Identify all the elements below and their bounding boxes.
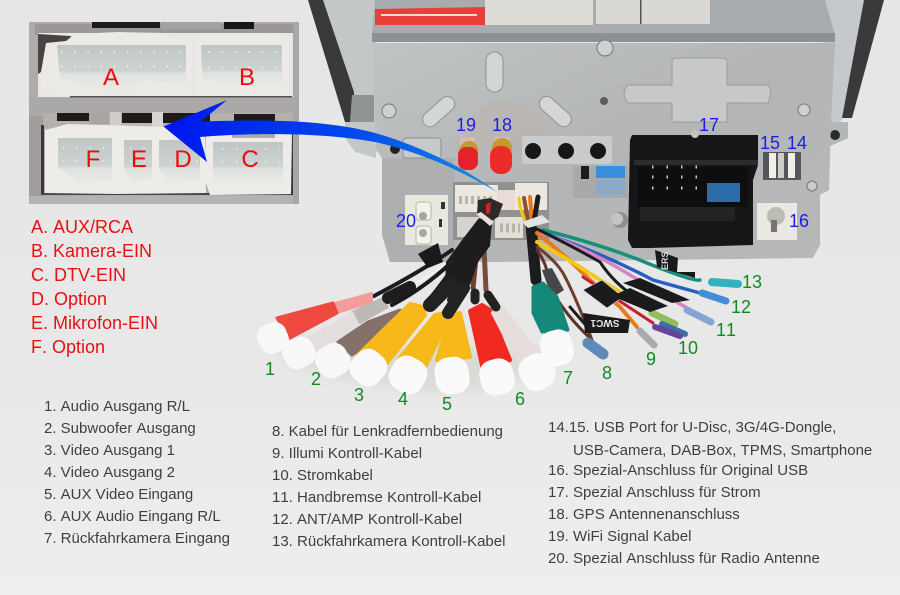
list: items 14 to 20: 19. WiFi Signal Kabel [548,528,691,545]
list: items 14 to 20: 17. Spezial Anschluss für Strom [548,484,761,501]
green cable numbers: 4 [398,389,408,409]
right mounting bracket [822,0,884,148]
list: items 8 to 13 [272,423,505,550]
port 20: radio antenna socket [405,195,448,245]
list: items 8 to 13: 12. ANT/AMP Kontroll-Kabel [272,511,462,528]
RCA plug 8: white [493,308,561,396]
blue port numbers: 20 [396,211,416,231]
connector letters: E [131,146,147,173]
green cable numbers: 9 [646,349,656,369]
black wire tags: SWC1 [590,317,619,328]
green cable numbers: 13 [742,272,762,292]
port plugs: holes [522,136,612,164]
connector letters: C [241,146,259,173]
port 16: original USB socket [757,181,817,240]
list: items 14 to 20: 20. Spezial Anschluss für Radio Antenne [548,550,820,567]
green cable numbers: 6 [515,389,525,409]
legend: connectors A to F [31,217,158,357]
wire end caps [588,282,738,354]
arrow: blue curved pointer to connector [164,100,497,192]
legend: connectors A to F: F. Option [31,337,105,357]
list: items 14 to 20: USB-Camera, DAB-Box, TPMS, Smartphone [573,442,872,459]
list: items 1 to 7: 5. AUX Video Eingang [44,486,193,503]
legend: connectors A to F: E. Mikrofon-EIN [31,313,158,333]
RCA plug 6: yellow [433,313,471,396]
list: items 14 to 20: 18. GPS Antennenanschluss [548,506,740,523]
list: items 8 to 13: 10. Stromkabel [272,467,373,484]
legend: connectors A to F: B. Kamera-EIN [31,241,152,261]
connector A [40,32,192,96]
black wire tags: ERS [660,251,670,270]
green cable numbers: 7 [563,368,573,388]
RCA plug 9: teal [533,283,577,370]
blue port numbers: 15 [760,133,780,153]
list: items 1 to 7 [44,398,230,547]
RCA plug 4: yellow [344,304,425,392]
connector letters [86,64,259,173]
list: items 8 to 13: 9. Illumi Kontroll-Kabel [272,445,422,462]
list: items 1 to 7: 2. Subwoofer Ausgang [44,420,196,437]
blue port numbers: 17 [699,115,719,135]
blue port numbers: 14 [787,133,807,153]
RCA plug 1: red [253,293,372,358]
list: items 1 to 7: 7. Rückfahrkamera Eingang [44,530,230,547]
list: items 1 to 7: 4. Video Ausgang 2 [44,464,175,481]
blue port numbers: 16 [789,211,809,231]
connector C [205,134,292,195]
RCA plug 5: yellow [383,313,447,400]
black wire tags [583,250,695,333]
black sleeve, heat shrink and cable tie [445,198,503,285]
list: items 1 to 7: 3. Video Ausgang 1 [44,442,175,459]
port 17: black power socket [628,130,758,248]
connectors F, E, D [45,124,206,194]
DIP switch [573,166,628,198]
connector letters: D [174,146,192,173]
list: items 8 to 13: 13. Rückfahrkamera Kontroll-Kabel [272,533,505,550]
green cable numbers: 12 [731,297,751,317]
green cable numbers: 2 [311,369,321,389]
green cable numbers [265,272,762,414]
list: items 14 to 20: 16. Spezial-Anschluss für Original USB [548,462,808,479]
connector letters: A [103,64,119,91]
panel: connector close-up photo [29,22,299,204]
blue port numbers: 18 [492,115,512,135]
radio unit: top cover [372,0,835,42]
cable loom: left group [374,248,486,305]
tag: black label left [418,243,443,268]
legend: connectors A to F: A. AUX/RCA [31,217,133,237]
list: items 8 to 13: 8. Kabel für Lenkradfernbedienung [272,423,503,440]
blue port numbers [396,115,809,231]
RCA plug 2: white [278,298,388,373]
green cable numbers: 10 [678,338,698,358]
plug shadows [275,340,550,391]
port 14 and 15: USB sockets [763,152,801,180]
RCA plug 7: red [470,305,518,399]
list: items 14 to 20: 14.15. USB Port for U-Disc, 3G/4G-Dongle, [548,419,836,436]
green cable numbers: 11 [716,320,736,340]
connector letters: B [239,64,255,91]
left mounting bracket [308,0,376,158]
connector letters: F [86,146,100,173]
legend: connectors A to F: C. DTV-EIN [31,265,126,285]
cable loom: right group [519,197,700,340]
list: items 14 to 20 [548,419,872,567]
green cable numbers: 5 [442,394,452,414]
list: items 8 to 13: 11. Handbremse Kontroll-Kabel [272,489,481,506]
legend: connectors A to F: D. Option [31,289,107,309]
connector B [195,33,289,96]
harness connectors plugged into the unit [453,182,549,240]
list: items 1 to 7: 1. Audio Ausgang R/L [44,398,190,415]
RCA plug 3: brown [310,310,400,383]
port 19 and 18: GPS and WiFi antenna connectors [458,137,512,174]
cable tie and tuft on the right bundle [522,215,564,298]
list: items 1 to 7: 6. AUX Audio Eingang R/L [44,508,221,525]
radio unit: rear metal plate [373,43,835,262]
green cable numbers: 1 [265,359,275,379]
green cable numbers: 3 [354,385,364,405]
embossed ovals and screws [382,40,810,228]
fuse [707,183,740,202]
strain reliefs [388,283,496,313]
green cable numbers: 8 [602,363,612,383]
blue port numbers: 19 [456,115,476,135]
